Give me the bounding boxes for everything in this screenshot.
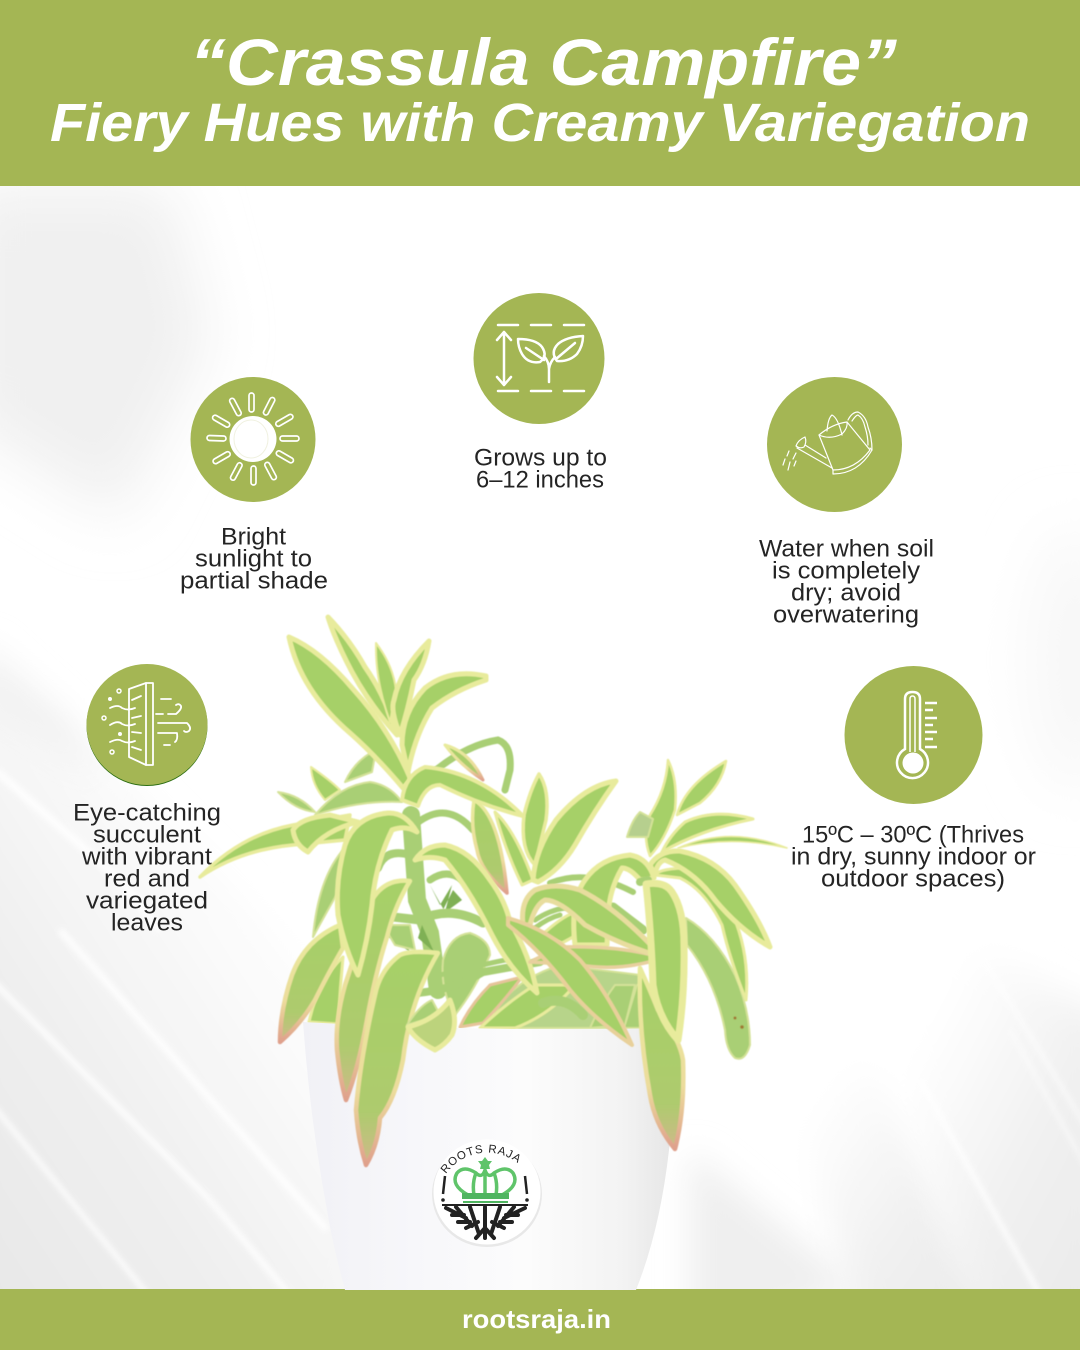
icon: plant height <box>474 293 604 424</box>
text: watering <box>759 536 934 628</box>
text: foliage feature <box>73 800 221 936</box>
text: foliage feature: red and <box>104 866 190 892</box>
text: temperature: in dry, sunny indoor or <box>791 844 1036 870</box>
text: watering: overwatering <box>773 602 919 628</box>
icon: sun <box>190 377 316 502</box>
text: light requirement: Bright <box>221 524 286 550</box>
title line 1: “Crassula Campfire” <box>190 25 897 99</box>
back leaves and stems <box>278 617 787 1028</box>
text: foliage feature: with vibrant <box>81 844 212 870</box>
text: watering: dry; avoid <box>791 580 901 606</box>
text: plant height <box>474 444 607 494</box>
text: foliage feature: Eye-catching <box>73 800 221 826</box>
footer website: rootsraja.in <box>462 1304 611 1334</box>
plant in pot <box>198 614 788 1290</box>
icon: air purifying <box>86 664 208 786</box>
text: foliage feature: variegated <box>86 888 208 914</box>
footer bar <box>0 1289 1080 1350</box>
front leaves <box>200 745 770 1165</box>
pot sticker: Roots Raja logo: ROOTS RAJA <box>440 1144 520 1174</box>
pot sticker: Roots Raja logo <box>432 1144 542 1247</box>
white pot <box>303 1022 673 1290</box>
text: foliage feature: leaves <box>111 910 183 936</box>
text: light requirement: partial shade <box>180 568 328 594</box>
text: watering: Water when soil <box>759 536 934 562</box>
text: light requirement <box>180 524 328 594</box>
icon: thermometer <box>844 666 982 804</box>
text: temperature: 15ºC – 30ºC (Thrives <box>802 822 1024 848</box>
text: light requirement: sunlight to <box>195 546 312 572</box>
text: watering: is completely <box>772 558 920 584</box>
text: plant height: 6–12 inches <box>476 466 604 494</box>
text: plant height: Grows up to <box>474 444 607 472</box>
text: temperature: outdoor spaces) <box>821 866 1005 892</box>
text: foliage feature: succulent <box>93 822 201 848</box>
text: temperature <box>791 822 1036 892</box>
title banner <box>0 0 1080 186</box>
icon: watering can <box>767 377 902 512</box>
title line 2: Fiery Hues with Creamy Variegation <box>50 93 1030 153</box>
